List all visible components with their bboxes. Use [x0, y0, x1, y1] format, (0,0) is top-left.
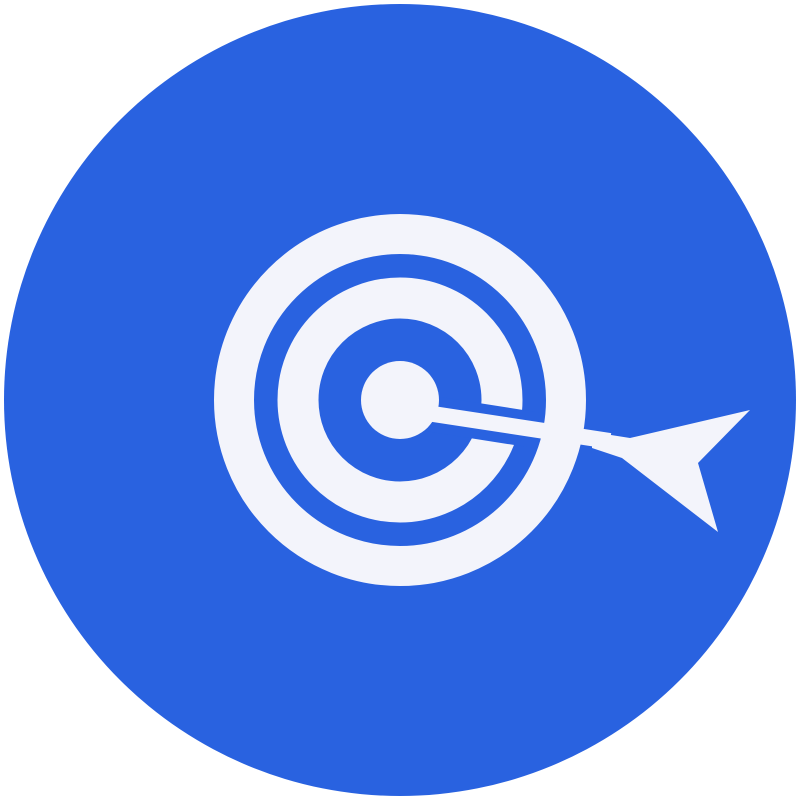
arrow head [592, 410, 750, 532]
center dot [361, 361, 439, 439]
gap around arrow shaft [420, 412, 560, 434]
inner ring [298, 298, 502, 502]
arrow shaft [420, 412, 610, 441]
arrow [420, 410, 750, 532]
target [234, 234, 566, 566]
outer ring [234, 234, 566, 566]
